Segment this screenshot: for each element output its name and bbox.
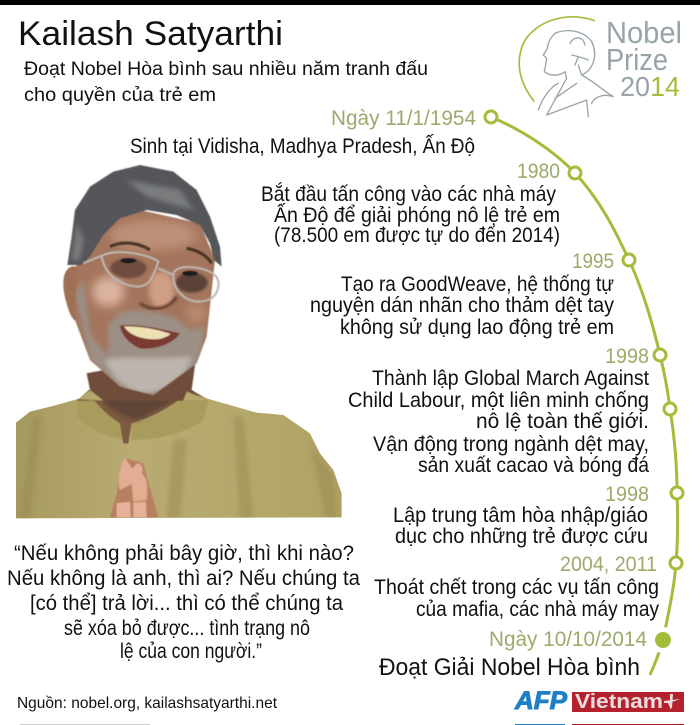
event: 1998 integration centre xyxy=(393,483,649,548)
logo: laureate medallion xyxy=(519,17,613,117)
event: birth 1954: Ngày 11/1/1954 xyxy=(331,107,476,130)
event: Nobel 2014: Đoạt Giải Nobel Hòa bình xyxy=(379,654,640,681)
cropped repeat of logos at bottom edge xyxy=(20,724,684,725)
event: 1995: 1995 xyxy=(572,250,614,273)
photo: mouth xyxy=(120,325,180,349)
top black bar xyxy=(0,0,700,5)
event: 2004, 2011 xyxy=(374,553,659,621)
event: 1995: Tạo ra GoodWeave, hệ thống tự xyxy=(341,273,614,296)
quote: “Nếu không phải bây giờ, thì khi nào? xyxy=(14,542,354,565)
quote xyxy=(7,542,360,663)
timeline curve xyxy=(485,111,683,675)
subtitle: Đoạt Nobel Hòa bình sau nhiều năm tranh đấu xyxy=(24,59,428,80)
event: 1998 Global March: Vận động trong ngành dệt may, xyxy=(373,433,649,456)
event: 1998 Global March xyxy=(348,345,649,477)
portrait photo xyxy=(16,165,342,518)
event: 1980: (78.500 em được tự do đến 2014) xyxy=(274,224,560,247)
photo: glasses xyxy=(83,252,219,302)
source: Nguồn: nobel.org, kailashsatyarthi.net xyxy=(17,695,278,712)
quote: Nếu không là anh, thì ai? Nếu chúng ta xyxy=(7,567,360,590)
event: 1995 xyxy=(310,250,614,339)
event: 1980: 1980 xyxy=(517,160,560,183)
Vietnam+ logo xyxy=(572,691,684,713)
Vietnam+ logo: Vietnam xyxy=(575,691,663,713)
event: 1998 Global March: sản xuất cacao và bóng đá xyxy=(418,454,649,477)
quote: [có thể] trả lời... thì có thể chúng ta xyxy=(30,592,343,615)
event: 1998 integration centre: dục cho những trẻ được cứu xyxy=(395,525,648,548)
photo: head xyxy=(63,165,222,401)
event: 1980: Bắt đầu tấn công vào các nhà máy xyxy=(261,183,556,206)
title: Kailash Satyarthi xyxy=(18,15,283,53)
logo: wordmark xyxy=(606,15,682,102)
event: birth 1954 xyxy=(130,107,476,158)
Nobel Prize 2014 logo xyxy=(519,15,682,117)
event: Nobel 2014 xyxy=(379,628,647,681)
AFP logo: AFP xyxy=(514,687,567,715)
event: 2004, 2011: của mafia, các nhà máy may xyxy=(416,598,659,621)
event: 1995: nguyện dán nhãn cho thảm dệt tay xyxy=(310,294,614,317)
quote: lệ của con người.” xyxy=(120,640,262,663)
photo: shirt and hands xyxy=(16,388,342,518)
timeline dots xyxy=(485,111,683,653)
event: 1998 integration centre: 1998 xyxy=(605,483,649,506)
subtitle: cho quyền của trẻ em xyxy=(24,85,216,106)
event: 1980: Ấn Độ để giải phóng nô lệ trẻ em xyxy=(274,204,560,227)
event: 2004, 2011: Thoát chết trong các vụ tấn công xyxy=(374,576,659,599)
subtitle xyxy=(24,59,428,106)
logo: wordmark: Prize xyxy=(606,42,668,77)
logo: wordmark: Nobel xyxy=(606,15,682,50)
event: 1995: không sử dụng lao động trẻ em xyxy=(340,316,614,339)
event: 1980 xyxy=(261,160,560,247)
event: 1998 integration centre: Lập trung tâm hòa nhập/giáo xyxy=(393,504,648,527)
photo: eyebrows and eyes xyxy=(110,243,212,263)
event: 2004, 2011: 2004, 2011 xyxy=(560,553,657,576)
event: Nobel 2014: Ngày 10/10/2014 xyxy=(489,628,647,651)
quote: sẽ xóa bỏ được... tình trạng nô xyxy=(64,617,310,640)
event: 1998 Global March: nô lệ toàn thế giới. xyxy=(476,410,649,433)
photo: hair xyxy=(67,165,222,267)
event: 1998 Global March: Child Labour, một liên minh chống xyxy=(348,389,649,412)
event: 1998 Global March: 1998 xyxy=(605,345,649,368)
event: 1998 Global March: Thành lập Global March Against xyxy=(372,367,649,390)
event: birth 1954: Sinh tại Vidisha, Madhya Pradesh, Ấn Độ xyxy=(130,135,475,158)
logo: wordmark: 2014 xyxy=(620,71,680,102)
